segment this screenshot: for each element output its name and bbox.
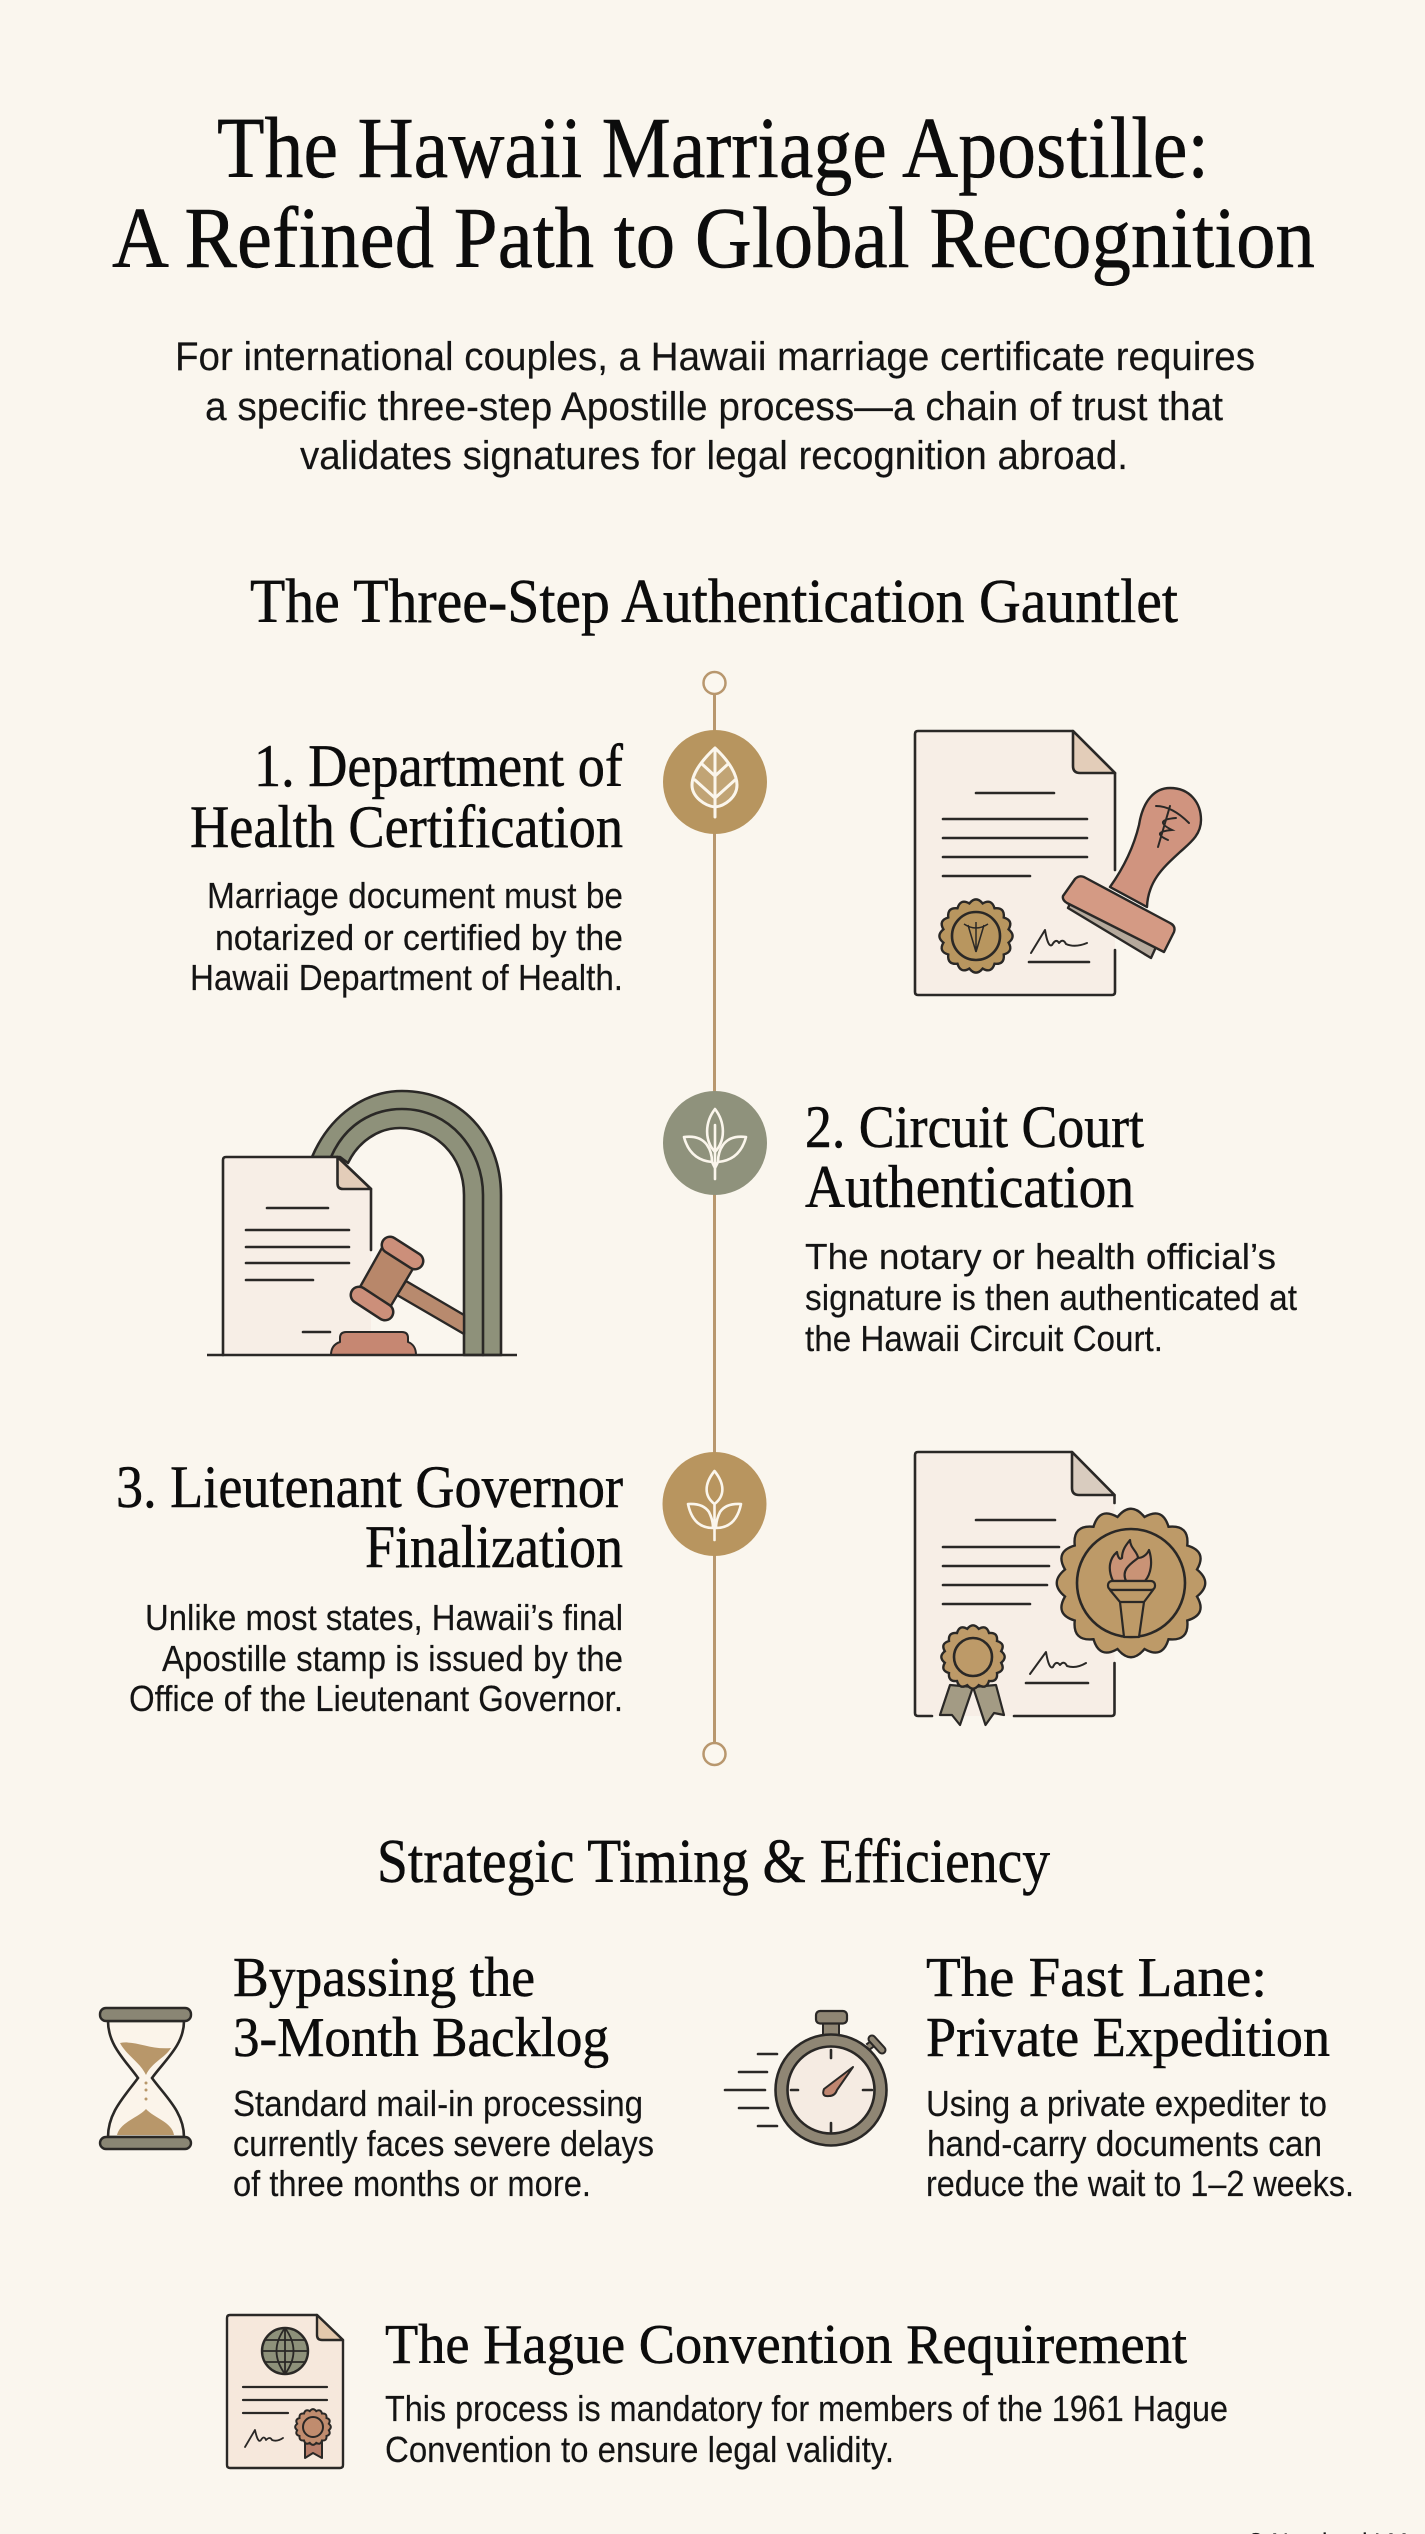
fast lane text: hand-carry documents can — [927, 2123, 1322, 2164]
step 1 text: Marriage document must be — [207, 875, 623, 916]
hague convention text: Convention to ensure legal validity. — [385, 2429, 894, 2470]
step 2 text — [805, 1094, 1297, 1359]
step 2 text: 2. Circuit Court — [805, 1094, 1144, 1160]
fast lane text: Private Expedition — [926, 2007, 1330, 2069]
step 2 text: Authentication — [805, 1154, 1134, 1220]
backlog text: 3-Month Backlog — [233, 2007, 609, 2069]
step 2 text: the Hawaii Circuit Court. — [805, 1318, 1163, 1359]
step 1 text: Health Certification — [190, 794, 623, 860]
title — [112, 99, 1315, 286]
icon: step 3 sprout medallion — [662, 1452, 766, 1556]
step 2 text: The notary or health official’s — [805, 1236, 1276, 1277]
icon: stopwatch — [725, 2011, 886, 2146]
icon: hourglass — [100, 2008, 191, 2149]
step 3 text: Unlike most states, Hawaii’s final — [145, 1597, 623, 1638]
fast lane text — [926, 1947, 1354, 2204]
step 3 text: 3. Lieutenant Governor — [116, 1454, 623, 1520]
step 3 text: Apostille stamp is issued by the — [162, 1638, 623, 1679]
step 3 text — [116, 1454, 623, 1719]
icon: hague certificate with globe — [227, 2315, 343, 2468]
backlog text: currently faces severe delays — [233, 2123, 654, 2164]
title: The Hawaii Marriage Apostille: — [217, 99, 1209, 196]
backlog text — [233, 1947, 654, 2204]
intro text: validates signatures for legal recognition abroad. — [300, 434, 1128, 478]
icon: step 2 sprout medallion — [663, 1091, 767, 1195]
hague convention text — [385, 2314, 1228, 2470]
backlog text: of three months or more. — [233, 2163, 591, 2204]
section heading: strategic timing: Strategic Timing & Efficiency — [377, 1828, 1050, 1896]
icon: step 1 leaf medallion — [663, 730, 767, 834]
timeline — [704, 672, 726, 1765]
fast lane text: reduce the wait to 1–2 weeks. — [926, 2163, 1354, 2204]
step 1 text: 1. Department of — [254, 733, 623, 799]
icon: certificate with caduceus stamp — [915, 731, 1201, 995]
step 2 text: signature is then authenticated at — [805, 1277, 1297, 1318]
step 1 text: Hawaii Department of Health. — [190, 957, 623, 998]
hague convention text: This process is mandatory for members of the 1961 Hague — [385, 2388, 1228, 2429]
fast lane text: The Fast Lane: — [926, 1947, 1267, 2009]
title: A Refined Path to Global Recognition — [112, 189, 1315, 286]
intro text — [175, 335, 1255, 478]
step 3 text: Finalization — [365, 1514, 623, 1580]
intro text: For international couples, a Hawaii marriage certificate requires — [175, 335, 1255, 379]
step 3 text: Office of the Lieutenant Governor. — [129, 1678, 623, 1719]
backlog text: Standard mail-in processing — [233, 2083, 643, 2124]
icon: certificate with torch seal — [915, 1452, 1205, 1725]
backlog text: Bypassing the — [233, 1947, 535, 2009]
fast lane text: Using a private expediter to — [926, 2083, 1327, 2124]
step 1 text — [190, 733, 623, 998]
section heading: three-step gauntlet: The Three-Step Authentication Gauntlet — [250, 568, 1178, 636]
step 1 text: notarized or certified by the — [215, 917, 623, 958]
icon: arch with document and gavel — [207, 1091, 517, 1355]
intro text: a specific three-step Apostille process—a chain of trust that — [205, 385, 1223, 429]
hague convention text: The Hague Convention Requirement — [385, 2314, 1187, 2376]
